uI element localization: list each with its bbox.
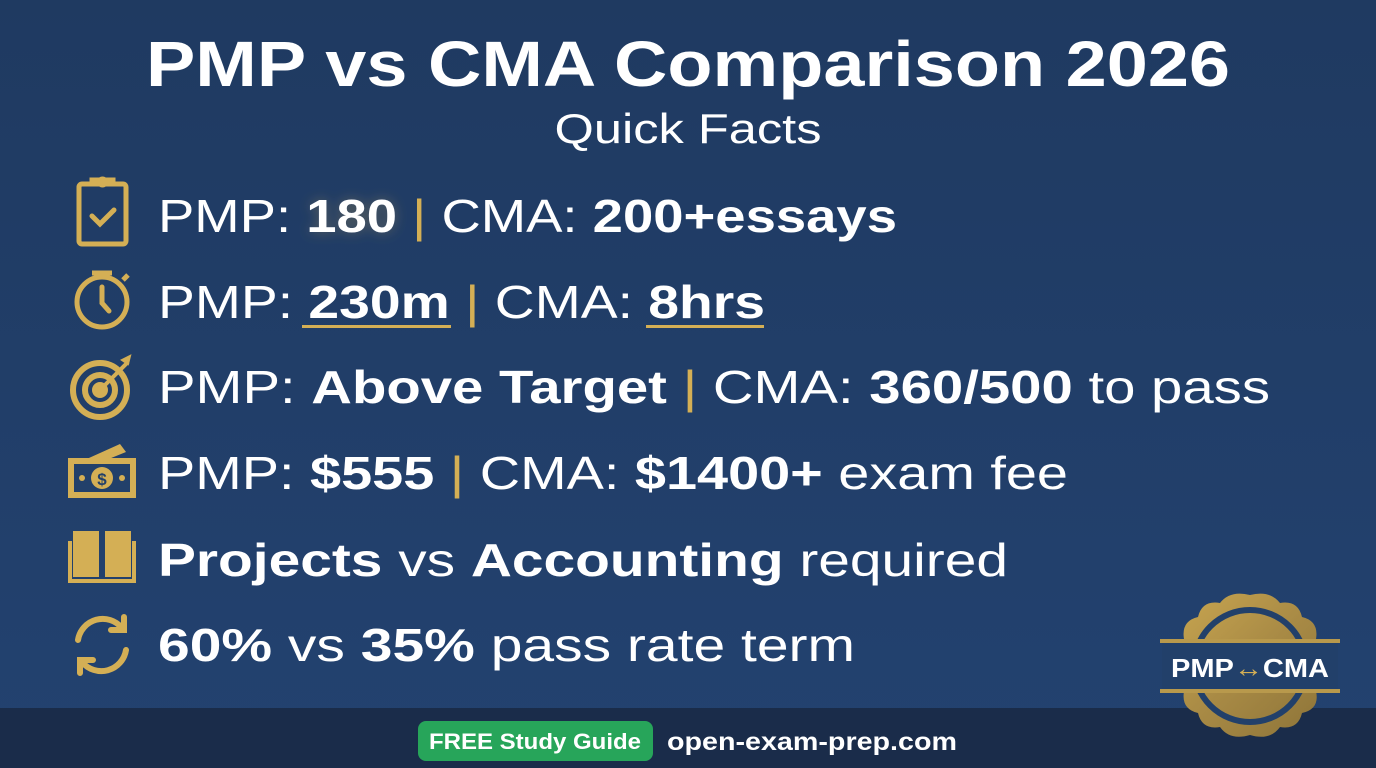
badge: PMP↔CMA seal bbox=[1160, 594, 1340, 737]
icon: stopwatch bbox=[77, 273, 128, 327]
icon: cycle arrows bbox=[78, 617, 126, 673]
footer: free study guide pill: FREE Study Guide bbox=[429, 729, 641, 754]
row 3: passing score: PMP: Above Target | CMA: 360/500 to pass bbox=[158, 361, 1270, 413]
footer bar bbox=[0, 708, 1376, 768]
row 4: exam fee: PMP: $555 | CMA: $1400+ exam fee bbox=[158, 447, 1068, 499]
footer: free study guide pill bbox=[418, 721, 653, 761]
row 1: questions bbox=[79, 179, 897, 244]
row 1: questions: PMP: 180 | CMA: 200+essays bbox=[158, 190, 897, 242]
badge: PMP↔CMA seal: PMP ↔CMA bbox=[1171, 653, 1329, 683]
icon: money bbox=[68, 444, 136, 498]
icon: book bbox=[68, 531, 136, 583]
icon: clipboard bbox=[79, 179, 126, 244]
subtitle: Quick Facts bbox=[554, 105, 822, 152]
row 2: duration: PMP: 230m | CMA: 8hrs bbox=[158, 276, 765, 328]
row 6: pass rate: 60% vs 35% pass rate term bbox=[158, 619, 855, 671]
icon: target bbox=[73, 356, 130, 417]
footer: website: open-exam-prep.com bbox=[667, 728, 957, 756]
icon: money: $ bbox=[97, 470, 107, 489]
row 5: experience: Projects vs Accounting required bbox=[158, 534, 1008, 586]
title: PMP vs CMA Comparison 2026 bbox=[146, 28, 1230, 100]
